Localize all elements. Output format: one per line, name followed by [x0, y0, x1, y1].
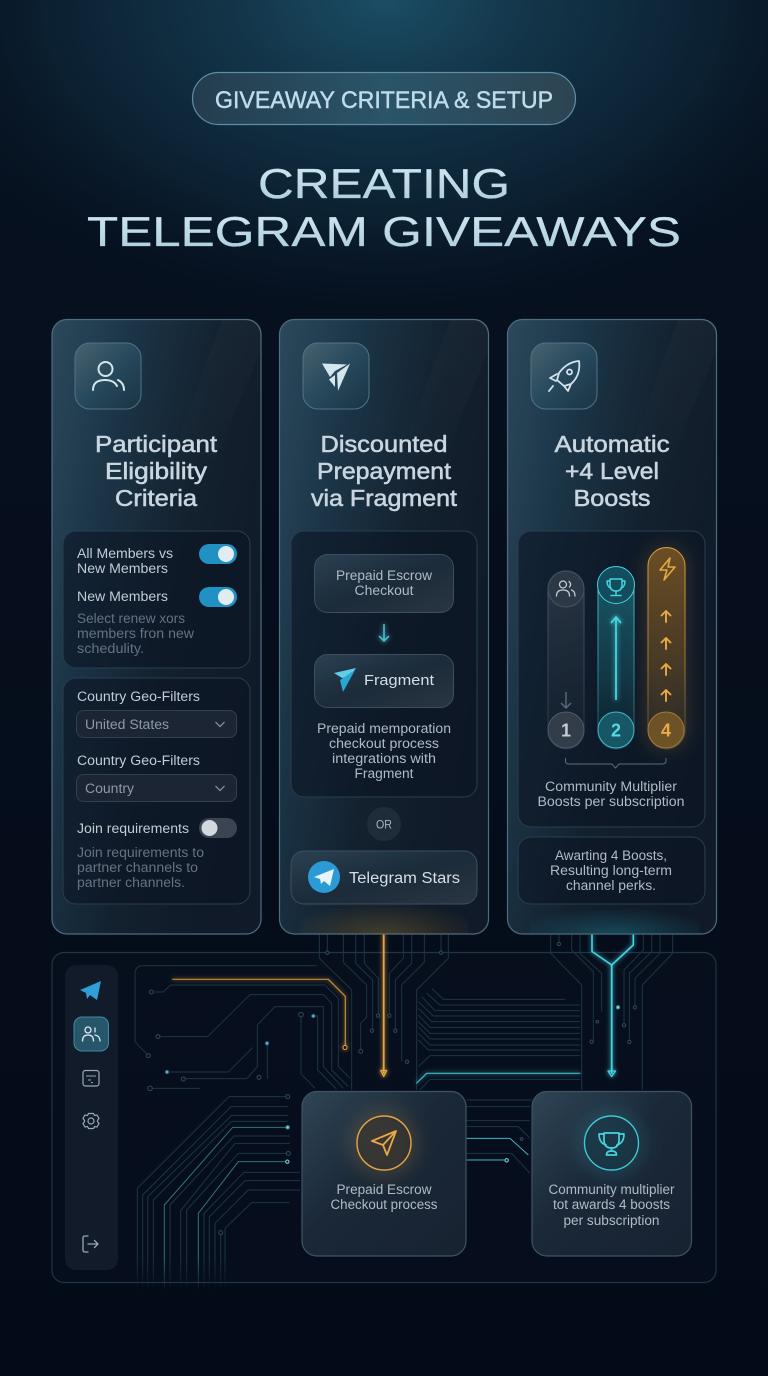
pillar 1: 1: [561, 720, 571, 740]
bottom dashboard panel frame: [52, 952, 716, 1282]
heading: [95, 431, 218, 511]
pillar 2: [598, 566, 634, 749]
panel: awarding boosts note: channel perks.: [566, 878, 656, 893]
heading: Participant: [95, 431, 218, 457]
card sheen: [606, 320, 717, 520]
heading: Discounted: [320, 431, 448, 457]
pillar 1: [548, 571, 584, 749]
box: community multiplier: tot awards 4 boosts: [553, 1197, 670, 1212]
card sheen: [150, 320, 261, 520]
panel: prepaid flow: Prepaid memporation: [317, 721, 451, 736]
title: TELEGRAM GIVEAWAYS: [87, 208, 681, 255]
heading: Prepayment: [317, 458, 452, 484]
panel: boost multiplier chart: Community Multiplier: [545, 779, 678, 794]
icon: settings gear: [83, 1114, 99, 1128]
panel: geo filters and join requirements: partner channels.: [77, 875, 185, 890]
toggle off: [199, 818, 237, 838]
card sheen: [378, 320, 489, 520]
card bottom glow: [300, 880, 468, 934]
button: prepaid escrow checkout: Checkout: [354, 583, 414, 598]
bracket: [566, 758, 666, 768]
panel: boost multiplier chart: Boosts per subscription: [538, 794, 684, 809]
card 3: automatic +4 level boosts: [508, 320, 717, 934]
icon: logout: [83, 1236, 98, 1252]
panel: boost multiplier chart: [518, 531, 705, 827]
toggle on: [199, 544, 237, 564]
heading: [311, 431, 458, 511]
icon: calendar panel: [83, 1070, 99, 1086]
orange circuit connectors: [173, 934, 387, 1076]
box: prepaid escrow checkout process: Prepaid Escrow: [336, 1182, 432, 1197]
circuit traces right: [388, 934, 673, 1173]
heading: Criteria: [115, 485, 197, 511]
card 1: participant eligibility criteria: [52, 320, 261, 934]
header pill: giveaway criteria and setup: [192, 72, 576, 124]
panel: geo filters and join requirements: partner channels to: [77, 860, 198, 875]
or badge: OR: [376, 818, 392, 832]
panel: member toggles: New Members: [77, 589, 168, 604]
pillar 3: [645, 545, 688, 750]
heading: +4 Level: [565, 458, 659, 484]
dropdown: country: [76, 774, 236, 802]
panel: member toggles: [63, 531, 250, 668]
circuit traces left: [135, 934, 380, 1290]
button: telegram stars: Telegram Stars: [349, 870, 460, 887]
heading: [554, 431, 670, 511]
panel: geo filters and join requirements: Country Geo-Filters: [77, 753, 200, 768]
dropdown: united states: [76, 710, 236, 738]
title: CREATING: [258, 160, 510, 207]
panel: member toggles: members fron new: [77, 626, 194, 641]
icon: orange paper plane: [350, 1109, 418, 1177]
panel: member toggles: New Members: [77, 561, 168, 576]
icon: telegram plane: [80, 981, 101, 1000]
icon: fragment: [303, 343, 369, 409]
title: [87, 160, 681, 255]
icon: cyan trophy: [578, 1109, 646, 1177]
box: prepaid escrow checkout process: [302, 1092, 466, 1256]
heading: via Fragment: [311, 485, 458, 511]
panel: geo filters and join requirements: Join requirements: [77, 821, 189, 836]
box: community multiplier: per subscription: [564, 1213, 660, 1228]
panel: geo filters and join requirements: Country Geo-Filters: [77, 689, 200, 704]
icon: rocket: [531, 343, 597, 409]
panel: awarding boosts note: Awarting 4 Boosts,: [555, 848, 667, 863]
card 2: discounted prepayment via fragment: [280, 320, 489, 934]
heading: Eligibility: [105, 458, 208, 484]
panel: member toggles: Select renew xors: [77, 611, 185, 626]
panel: member toggles: All Members vs: [77, 546, 173, 561]
sidebar: [65, 965, 118, 1270]
header pill: giveaway criteria and setup: GIVEAWAY CRITERIA & SETUP: [215, 87, 553, 114]
dropdown: country: Country: [85, 781, 134, 796]
arrow down: [379, 624, 389, 641]
or badge: [367, 807, 401, 841]
panel: prepaid flow: [291, 531, 477, 797]
box: community multiplier: Community multiplier: [548, 1182, 675, 1197]
dropdown: united states: United States: [85, 717, 169, 732]
panel: prepaid flow: Fragment: [354, 766, 414, 781]
panel: awarding boosts note: [518, 837, 705, 904]
panel: geo filters and join requirements: Join requirements to: [77, 845, 204, 860]
cyan circuit connectors: [417, 934, 633, 1083]
button: fragment: [314, 654, 454, 708]
panel: prepaid flow: checkout process: [329, 736, 439, 751]
button: prepaid escrow checkout: [314, 554, 454, 612]
box: community multiplier: [532, 1092, 692, 1256]
button: fragment: Fragment: [364, 672, 435, 689]
heading: Boosts: [574, 485, 650, 511]
icon: telegram logo: [308, 861, 340, 893]
pillar 3: 4: [661, 720, 671, 740]
icon: active members: [74, 1017, 108, 1051]
panel: member toggles: schedulity.: [77, 641, 144, 656]
card bottom glow: [530, 890, 700, 934]
panel: prepaid flow: integrations with: [332, 751, 436, 766]
panel: geo filters and join requirements: [63, 678, 250, 904]
pillar 2: 2: [611, 720, 621, 740]
button: telegram stars: [291, 851, 477, 904]
button: prepaid escrow checkout: Prepaid Escrow: [336, 568, 432, 583]
heading: Automatic: [554, 431, 670, 457]
panel: awarding boosts note: Resulting long-term: [550, 863, 672, 878]
toggle on: [199, 587, 237, 607]
icon: person: [75, 343, 141, 409]
box: prepaid escrow checkout process: Checkout process: [330, 1197, 438, 1212]
